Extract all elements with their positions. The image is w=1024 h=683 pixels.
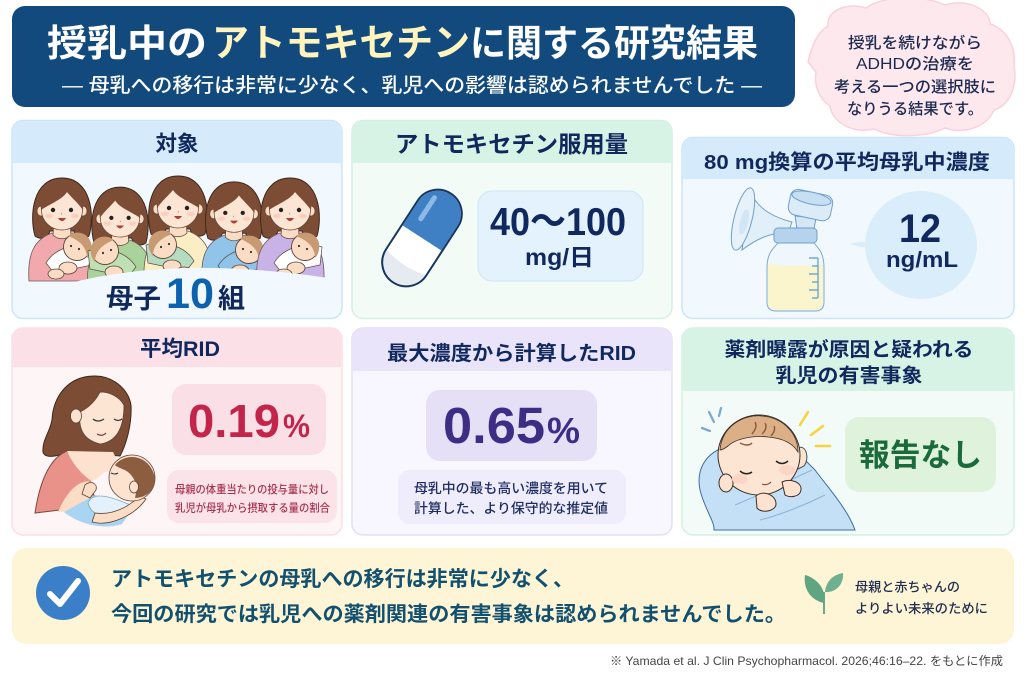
panel: mean RID xyxy=(12,328,342,535)
value box: none reported: 報告なし xyxy=(859,438,982,473)
value box: 40-100 mg/day: mg/日 xyxy=(525,244,594,270)
value circle: 12 ng/mL: ng/mL xyxy=(886,247,958,272)
conclusion banner xyxy=(12,548,1014,644)
note: conservative estimate: 計算した、より保守的な推定値 xyxy=(414,500,608,516)
heading: adverse events: 薬剤曝露が原因と疑われる xyxy=(724,338,974,361)
icon: mother breastfeeding xyxy=(35,376,155,527)
value box: 0.65% xyxy=(426,390,597,461)
title heading: アトモキセチン xyxy=(212,23,470,65)
heading: concentration: 80 mg換算の平均母乳中濃度 xyxy=(704,151,990,174)
heading: subjects: 対象 xyxy=(155,132,199,156)
stat: ten pairs: 10 xyxy=(166,270,214,318)
speech bubble: なりうる結果です。 xyxy=(847,100,983,118)
value circle: 12 ng/mL: 12 xyxy=(899,207,941,251)
panel: RID from peak concentration xyxy=(352,328,672,535)
note: definition of RID: 乳児が母乳から摂取する量の割合 xyxy=(175,500,330,514)
value box: 0.19% xyxy=(172,384,326,455)
icon: sleeping baby xyxy=(699,408,855,530)
panel: subjects xyxy=(12,120,342,318)
speech bubble: ADHDの治療を xyxy=(856,55,974,73)
note: conservative estimate: 母乳中の最も高い濃度を用いて xyxy=(414,480,608,496)
title heading: に関する研究結果 xyxy=(470,23,758,64)
speech bubble: 授乳を続けながら xyxy=(848,33,982,52)
value box: 40-100 mg/day xyxy=(478,191,643,281)
value box: 40-100 mg/day: 40～100 xyxy=(490,201,626,244)
value circle: 12 ng/mL xyxy=(865,191,977,299)
panel: atomoxetine dose xyxy=(352,120,672,318)
heading: mean RID: 平均RID xyxy=(140,337,220,361)
title heading: 授乳中の xyxy=(47,23,207,64)
value box: 0.65%: 0.65 xyxy=(443,397,545,454)
icon: sprout xyxy=(805,573,843,614)
value box: none reported xyxy=(845,417,996,492)
stat: ten pairs: 母子 xyxy=(106,284,161,314)
panel: mean milk concentration xyxy=(682,138,1014,318)
heading: adverse events xyxy=(724,338,974,387)
conclusion text: 今回の研究では乳児への薬剤関連の有害事象は認められませんでした。 xyxy=(111,602,786,626)
stat: ten pairs: 組 xyxy=(218,284,245,314)
side message: よりよい未来のために xyxy=(855,601,988,616)
heading: dose: アトモキセチン服用量 xyxy=(395,131,628,157)
speech bubble xyxy=(808,0,1015,136)
subtitle: ― 母乳への移行は非常に少なく、乳児への影響は認められませんでした ― xyxy=(62,74,762,97)
title heading xyxy=(47,23,758,65)
note: definition of RID xyxy=(167,470,337,523)
stat: ten pairs xyxy=(106,270,245,318)
icon: breast pump and bottle xyxy=(727,186,870,311)
conclusion text xyxy=(111,568,786,626)
side message: 母親と赤ちゃんの xyxy=(855,580,960,594)
icon: capsule xyxy=(373,180,471,296)
icon: five mothers holding babies xyxy=(29,176,335,292)
speech bubble: 考える一つの選択肢に xyxy=(834,78,996,96)
note: conservative estimate xyxy=(398,470,626,524)
conclusion text: アトモキセチンの母乳への移行は非常に少なく、 xyxy=(111,568,574,591)
heading: peak RID: 最大濃度から計算したRID xyxy=(387,342,636,365)
value box: 0.65%: % xyxy=(547,410,580,451)
note: definition of RID: 母親の体重当たりの投与量に対し xyxy=(175,482,329,496)
value box: 0.19%: % xyxy=(283,408,310,444)
heading: adverse events: 乳児の有害事象 xyxy=(776,365,922,387)
title banner xyxy=(12,6,795,107)
icon: check mark xyxy=(36,566,90,620)
value box: 0.19%: 0.19 xyxy=(188,395,280,447)
panel: adverse events xyxy=(682,328,1014,535)
side message xyxy=(855,580,988,616)
citation: ※ Yamada et al. J Clin Psychopharmacol. 2026;46:16–22. をもとに作成 xyxy=(610,654,1003,668)
